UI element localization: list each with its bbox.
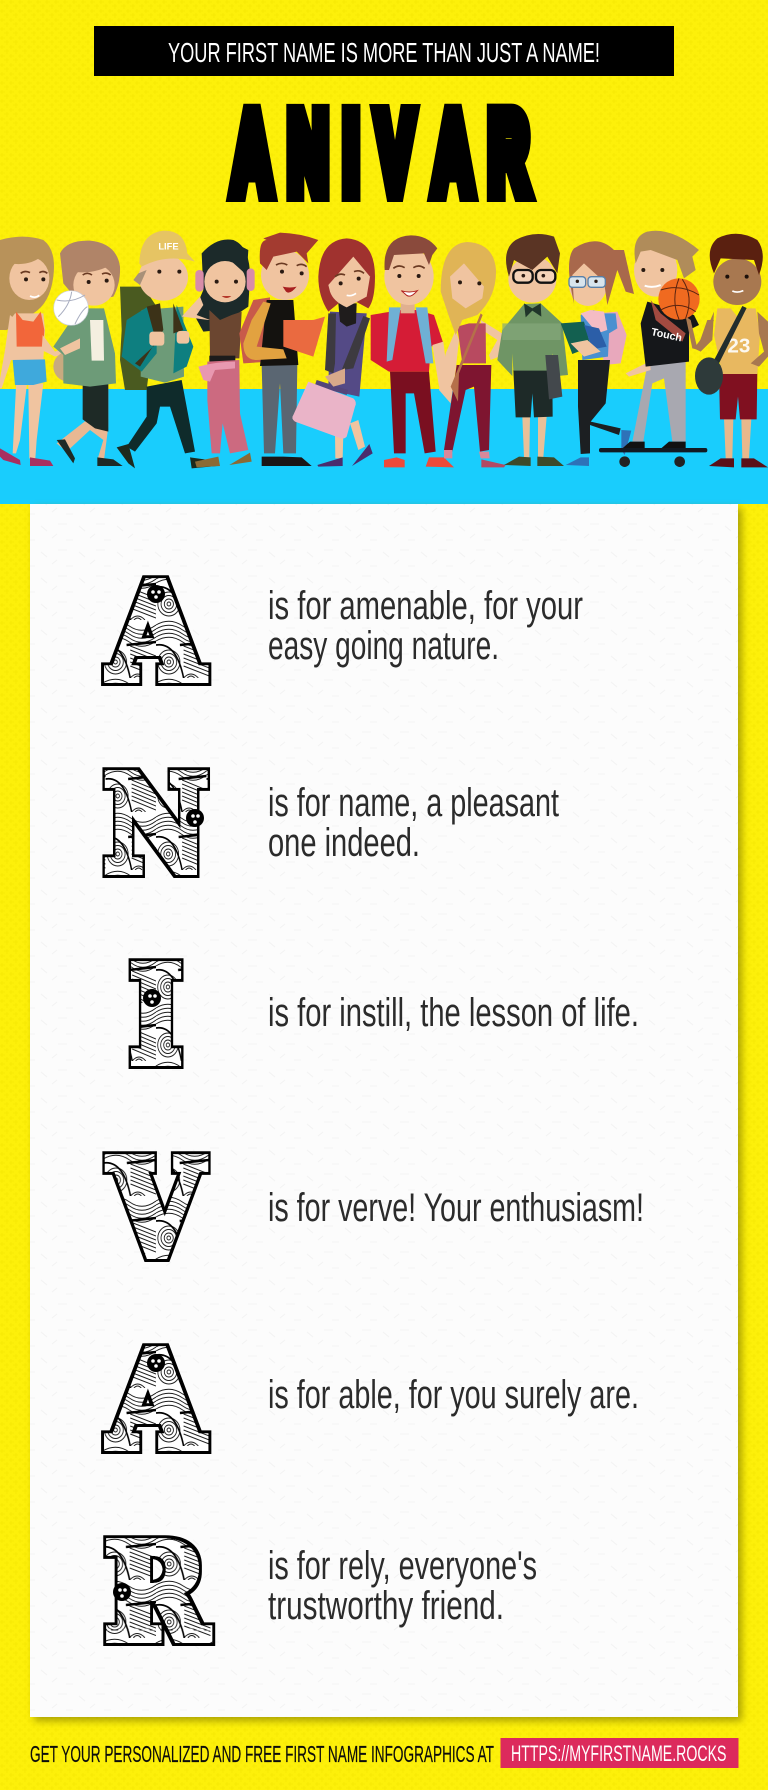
person: girl with orange top	[0, 237, 81, 466]
person: boy with cap and backpack: LIFE	[158, 241, 179, 251]
icon: ornamental letter A: A	[109, 1325, 204, 1477]
text: N description	[268, 781, 559, 865]
person: skater boy with basketball: Touch	[650, 326, 683, 344]
person: skater boy with basketball	[599, 231, 714, 467]
text: A description	[268, 584, 583, 668]
icon: ornamental letter R: R	[105, 1516, 208, 1669]
text: A description: easy going nature.	[268, 624, 499, 668]
icon: ornamental letter V: V	[109, 1133, 204, 1285]
title: name: ANIVAR	[232, 92, 528, 215]
person: boy with cap and backpack	[117, 231, 217, 468]
icon: ornamental letter I: I	[130, 940, 182, 1092]
person: red-haired girl with pink bag	[292, 238, 375, 467]
person: boy with yellow tank top and bag	[694, 234, 768, 467]
text: I description: is for instill, the lesson of life.	[268, 991, 639, 1035]
text: N description: is for name, a pleasant	[268, 781, 559, 825]
person: girl with ponytail and tablet	[561, 241, 634, 466]
text: A description: is for amenable, for your	[268, 584, 583, 628]
row: letter V	[109, 1133, 644, 1285]
person: girl with headphones	[182, 239, 255, 467]
icon: ornamental letter A: A	[109, 557, 204, 709]
text: N description: one indeed.	[268, 821, 420, 865]
row: letter R	[105, 1516, 537, 1669]
person: girl with green jacket and volleyball	[53, 241, 123, 466]
text: R description	[268, 1544, 537, 1628]
illustration: group of students	[0, 231, 768, 468]
text: R description: trustworthy friend.	[268, 1584, 504, 1628]
row: letter A second	[109, 1325, 639, 1477]
row: letter N	[104, 748, 559, 901]
content card	[30, 504, 742, 1721]
row: letter I	[130, 940, 639, 1092]
row: letter A	[109, 557, 583, 709]
person: boy with yellow tank top and bag: 23	[727, 335, 750, 358]
blue floor band	[0, 389, 768, 504]
text: R description: is for rely, everyone's	[268, 1544, 537, 1588]
person: boy in red shirt with blue backpack	[371, 235, 454, 467]
person: boy with glasses and green sweater	[497, 234, 568, 466]
person: blonde girl with crossbody bag	[439, 242, 507, 467]
person: boy reading a book	[239, 233, 325, 466]
icon: ornamental letter N: N	[104, 748, 208, 901]
top banner	[94, 26, 674, 76]
